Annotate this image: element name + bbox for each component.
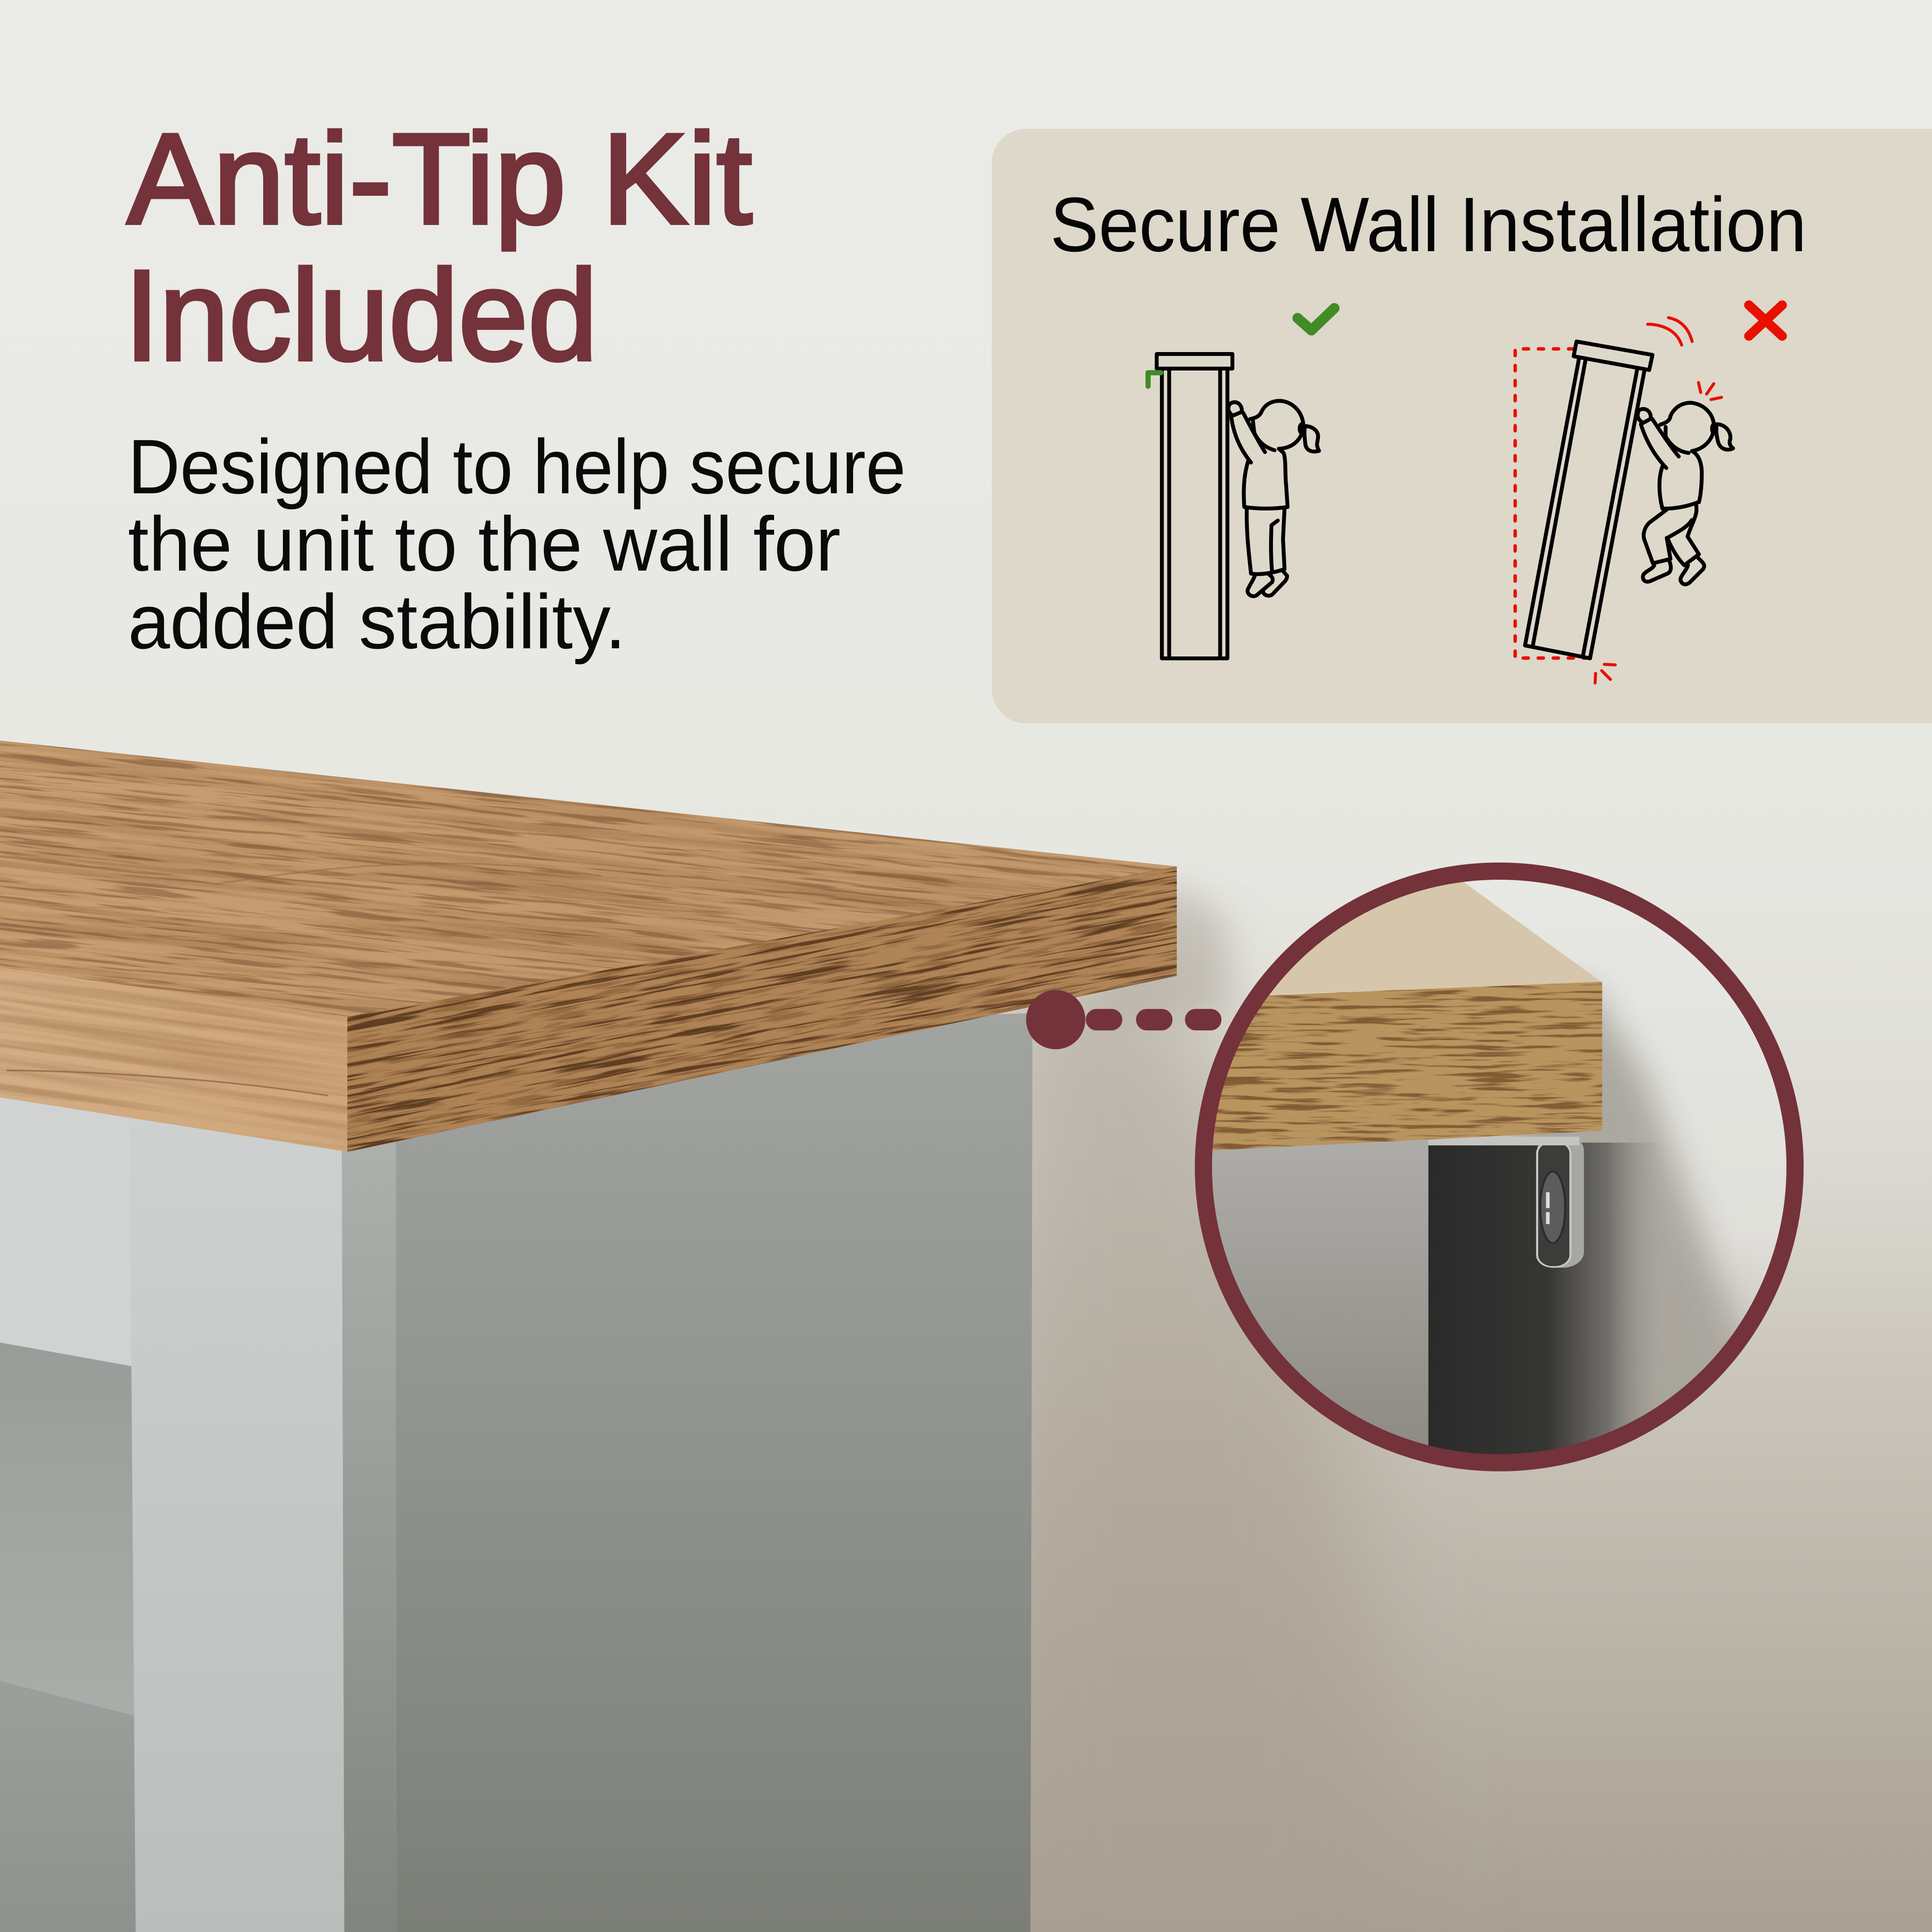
- title: [125, 106, 753, 387]
- wall shadow beside cabinet: [987, 880, 1417, 1932]
- cabinet upright: [1157, 354, 1233, 659]
- incorrect illustration: [1515, 305, 1782, 683]
- title: Anti-Tip Kit: [127, 106, 753, 252]
- metal bracket: [1428, 1135, 1584, 1268]
- cabinet shelf: [0, 1681, 136, 1932]
- panel background: [992, 129, 1932, 723]
- detail inset circle: [1165, 859, 1812, 1503]
- wood top: [1165, 878, 1602, 999]
- cabinet side panel: [342, 1013, 1033, 1932]
- cabinet opening: [0, 1343, 134, 1716]
- description text: added stability.: [128, 579, 626, 665]
- panel heading: Secure Wall Installation: [1050, 182, 1807, 268]
- original position dashed outline: [1515, 349, 1589, 658]
- title: Included: [125, 243, 598, 387]
- cabinet side: [1165, 1137, 1428, 1481]
- tipping cabinet: [1525, 341, 1653, 658]
- red motion marks: [1595, 318, 1722, 683]
- connector: dot and dashes: [1026, 990, 1221, 1049]
- cabinet: [0, 1013, 1033, 1932]
- wood left face: [0, 967, 347, 1152]
- wood front face: [0, 698, 1264, 1270]
- description text: [128, 424, 906, 665]
- icon: green check: [1297, 308, 1334, 330]
- cabinet upper rail: [0, 1091, 131, 1366]
- icon: green wall bracket: [1148, 373, 1161, 386]
- wood front: [1207, 978, 1607, 1157]
- description text: Designed to help secure: [128, 424, 906, 510]
- child on tipping cabinet: [1637, 403, 1733, 584]
- icon: red cross: [1749, 305, 1782, 336]
- panel: secure wall installation: [992, 129, 1932, 723]
- child holding cabinet: [1228, 401, 1319, 596]
- inset photo: wall bracket close-up: [1165, 859, 1812, 1503]
- dark gap: [1428, 1142, 1668, 1481]
- cabinet side strip: [342, 1140, 397, 1932]
- wood top surface: [0, 741, 1176, 1017]
- correct illustration: [1148, 308, 1334, 659]
- wooden top: [0, 635, 1291, 1270]
- inset ring: [1203, 871, 1795, 1463]
- cabinet front leg: [130, 1112, 344, 1932]
- description text: the unit to the wall for: [128, 501, 841, 587]
